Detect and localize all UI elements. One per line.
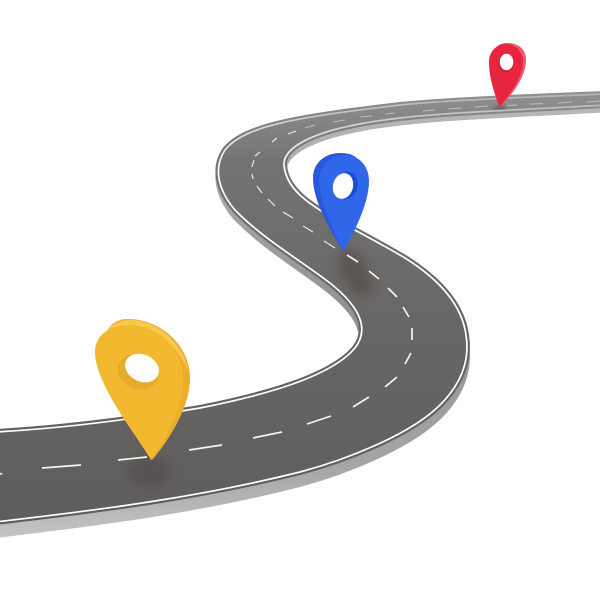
- road side wall: [0, 98, 600, 535]
- road surface: [0, 94, 600, 522]
- far lane dashes: [305, 101, 600, 128]
- blue pin side: [313, 153, 358, 252]
- red pin: [489, 43, 526, 107]
- blue pin face: [319, 155, 369, 252]
- road edge line: inner: [0, 94, 600, 432]
- red pin side: [496, 43, 526, 107]
- yellow pin: [95, 319, 190, 460]
- road: [0, 94, 600, 535]
- red pin hole: [498, 54, 514, 72]
- pin shadows on road: [128, 106, 507, 487]
- road edge line: outer: [0, 105, 600, 522]
- red pin face: [489, 44, 523, 107]
- blue pin hole: [331, 169, 361, 202]
- near lane dashes: [0, 255, 412, 474]
- blue pin: [313, 153, 369, 252]
- yellow pin top highlight: [108, 320, 189, 372]
- mid lane dashes: [252, 131, 335, 248]
- yellow pin face: [95, 325, 183, 460]
- yellow pin hole: [112, 348, 164, 396]
- yellow pin side: [108, 319, 190, 460]
